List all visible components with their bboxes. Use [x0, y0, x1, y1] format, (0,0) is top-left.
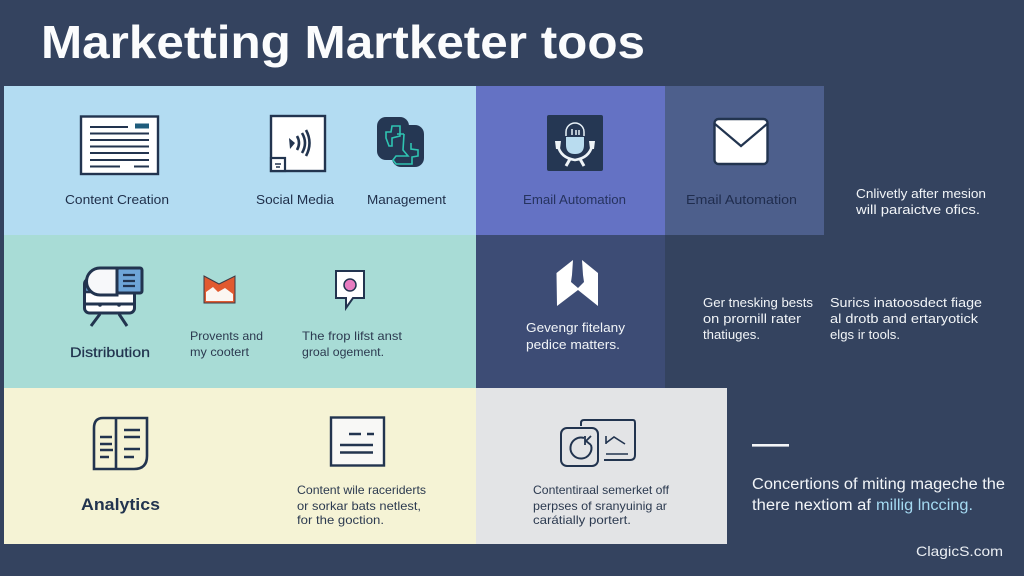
text block: frop: The frop lifst anst [302, 329, 403, 343]
text block: conclusion: there nextiom af [752, 497, 872, 514]
icon: red mail [204, 276, 235, 303]
icon: document [81, 116, 158, 174]
label: social media: Social Media [256, 193, 334, 207]
icon: chart cards [561, 420, 635, 466]
text block: surics: elgs ir tools. [830, 328, 900, 342]
panel: analytics [4, 388, 476, 544]
text block: contentiraal: perpses of sranyuinig ar [533, 499, 667, 513]
text block: tracking [703, 296, 813, 342]
panel: email automation purple [476, 86, 665, 235]
icon: envelope [714, 119, 768, 164]
panel: contentiraal grey [476, 388, 727, 544]
text block: provents [190, 329, 263, 359]
text block: governance [526, 321, 626, 352]
text block: conclusion [752, 476, 1005, 514]
icon: distribution screen [84, 268, 142, 326]
text block: conclusion: millig lnccing. [876, 497, 973, 514]
text block: content riders [297, 483, 426, 527]
icon: report document [331, 418, 384, 466]
text block: contentiraal [533, 483, 670, 527]
text block: surics [830, 296, 982, 342]
text block: tracking: on prornill rater [703, 312, 801, 326]
text block: governance: Gevengr fitelany [526, 321, 626, 335]
label: management: Management [367, 193, 447, 207]
panel: content creation and social media [4, 86, 476, 235]
text block: content riders: for the goction. [297, 513, 384, 527]
icon: white bookmark shape [556, 260, 598, 306]
text block: provents: Provents and [190, 329, 263, 343]
text block: frop: groal ogement. [302, 345, 384, 359]
text block: content riders: Content wile raceriderts [297, 483, 426, 497]
panel: distribution [4, 235, 476, 388]
label: email automation: Email Automation [686, 193, 797, 207]
footer brand: ClagicS.com [916, 543, 1003, 559]
text block: tracking: thatiuges. [703, 328, 760, 342]
text block: contentiraal: carátially portert. [533, 513, 631, 527]
text block: surics: Surics inatoosdect fiage [830, 296, 982, 310]
icon: robot in dark square [547, 115, 603, 171]
text block: content riders: or sorkar bats netlest, [297, 499, 421, 513]
label: email automation: Email Automation [523, 193, 626, 207]
panel: governance dark blue [476, 235, 665, 388]
text block: governance: pedice matters. [526, 338, 620, 352]
label: content creation: Content Creation [65, 193, 169, 207]
text block: top right note [855, 187, 986, 217]
title: Marketting Martketer toos [41, 16, 645, 68]
panel: email automation slate [665, 86, 824, 235]
label: analytics: Analytics [81, 495, 160, 514]
text block: top right note: will paraictve ofics. [855, 203, 980, 217]
text block: provents: my cootert [190, 345, 250, 359]
icon: management overlapping squares [377, 117, 424, 167]
text block: surics: al drotb and ertaryotick [830, 312, 979, 326]
conclusion dash [752, 444, 789, 447]
text block: top right note: Cnlivetly after mesion [856, 187, 986, 201]
text block: conclusion: Concertions of miting mageche the [752, 476, 1005, 493]
text block: frop [302, 329, 403, 359]
icon: open book [94, 418, 147, 469]
text block: tracking: Ger tnesking bests [703, 296, 813, 310]
icon: speech pin [336, 271, 364, 308]
icon: social media sound square [271, 116, 325, 171]
label: distribution: Distribution [70, 344, 150, 360]
text block: contentiraal: Contentiraal semerket off [533, 483, 670, 497]
